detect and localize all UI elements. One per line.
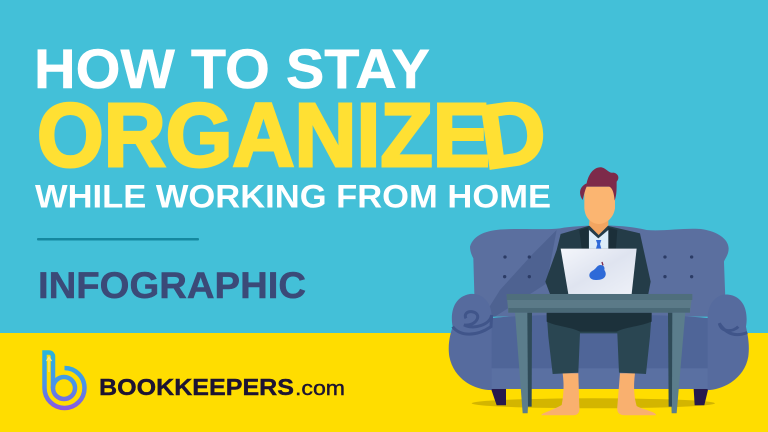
logo wordmark: bookkeepers.com: .com bbox=[295, 378, 345, 400]
laptop bbox=[561, 249, 637, 294]
heading: infographic: INFOGRAPHIC bbox=[38, 265, 306, 306]
left arm bbox=[449, 294, 492, 390]
left arm curl bbox=[453, 312, 492, 334]
title: organized: ORGANIZE bbox=[37, 86, 490, 186]
illustration: man on sofa with laptop bbox=[449, 167, 749, 415]
floor shadow bbox=[472, 398, 715, 408]
sofa back bbox=[470, 225, 729, 317]
tie bbox=[596, 240, 601, 249]
sofa legs bbox=[491, 389, 708, 405]
table bbox=[507, 294, 692, 413]
hair bbox=[580, 167, 618, 201]
feet and lower legs bbox=[541, 373, 579, 415]
subtitle: while working from home: WHILE WORKING FROM HOME bbox=[35, 178, 551, 214]
logo icon: b mark bbox=[44, 352, 85, 408]
jacket lapel bbox=[579, 227, 617, 249]
laptop logo: pear bbox=[589, 265, 606, 280]
right arm bbox=[708, 295, 749, 390]
right arm curl bbox=[719, 323, 747, 335]
trousers dark lap bbox=[547, 313, 652, 332]
jacket bbox=[545, 226, 651, 294]
table top bbox=[507, 294, 692, 313]
sofa buttons bbox=[503, 255, 693, 278]
sofa back shaded side bbox=[483, 230, 557, 317]
title: how to stay: HOW TO STAY bbox=[34, 37, 430, 100]
shirt bbox=[589, 230, 608, 249]
laptop lid bbox=[561, 249, 637, 294]
sofa seat bbox=[490, 315, 710, 370]
divider line bbox=[37, 238, 199, 240]
face bbox=[584, 187, 615, 224]
sofa bbox=[449, 225, 749, 390]
title: organized: D bbox=[474, 81, 552, 189]
neck bbox=[589, 213, 608, 235]
trousers bbox=[547, 313, 652, 374]
man bbox=[541, 167, 656, 415]
sofa base bbox=[488, 368, 710, 389]
table legs bbox=[515, 313, 532, 413]
background: sky blue bbox=[0, 0, 768, 333]
background: yellow floor band bbox=[0, 333, 768, 432]
logo wordmark: bookkeepers.com: BOOKKEEPERS bbox=[99, 374, 294, 400]
